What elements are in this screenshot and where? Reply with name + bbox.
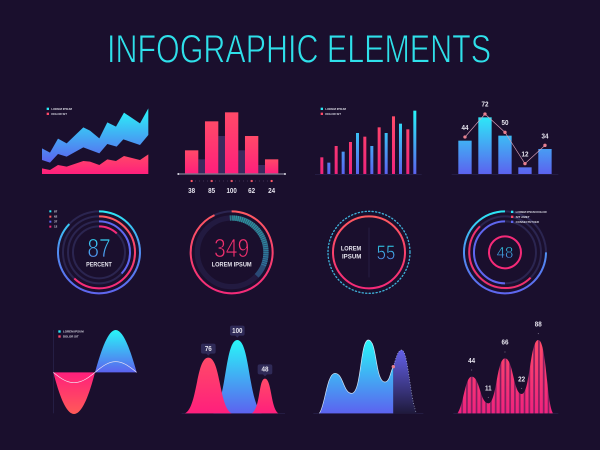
- blue area: [319, 340, 393, 413]
- value labels: 34: [541, 133, 549, 140]
- area chart: stacked bands: [42, 107, 148, 174]
- value labels: 44: [468, 358, 475, 365]
- legend: thin bars: [321, 107, 346, 116]
- value labels: 24: [268, 188, 275, 195]
- title: INFOGRAPHIC ELEMENTS: [107, 28, 491, 72]
- striped shape: [457, 340, 553, 413]
- blue thin bars: [327, 111, 416, 174]
- shadow bars: [198, 136, 265, 173]
- value labels: [188, 188, 275, 195]
- value labels: 50: [501, 120, 509, 127]
- value: 48: [497, 245, 514, 262]
- pink bars: [185, 112, 278, 173]
- pink thin bars: [320, 116, 409, 174]
- value labels: 38: [188, 188, 195, 195]
- value: 349: [214, 233, 249, 263]
- peak 76: [185, 358, 232, 413]
- legend: donut 48: [511, 210, 547, 224]
- axis: [177, 173, 286, 175]
- legend: 87: 12: [54, 225, 58, 229]
- legend: thin bars: LOREM IPSUM: [325, 107, 346, 111]
- caption: LOREM: [341, 245, 362, 252]
- legend: 87: 37: [54, 220, 58, 224]
- legend: sine: [58, 330, 84, 339]
- rings: [58, 211, 140, 293]
- pink area band: [42, 154, 148, 174]
- value labels: 12: [521, 152, 529, 159]
- legend: area chart: DOLOR SIT: [51, 112, 67, 116]
- value labels: [461, 102, 549, 159]
- white wave line: [53, 362, 137, 383]
- striped mountain chart: [453, 321, 558, 413]
- legend: thin bars: DOLOR SIT: [325, 112, 341, 116]
- donut: 349 lorem ipsum: [191, 211, 273, 293]
- value labels: 66: [501, 340, 509, 347]
- value: 55: [377, 242, 395, 264]
- bar chart: pink histogram: [177, 112, 286, 195]
- legend: 87: 62: [54, 215, 58, 219]
- value labels: 44: [461, 125, 469, 132]
- label dots: [471, 333, 539, 398]
- marker: [392, 365, 395, 368]
- sine wave chart: [53, 330, 137, 414]
- value: 87: [87, 233, 111, 263]
- legend: sine: LOREM IPSUM: [63, 330, 84, 334]
- donut: 87 percent: [49, 209, 140, 293]
- caption: LOREM IPSUM: [212, 262, 252, 269]
- legend: 87: [49, 209, 58, 229]
- smooth area chart: [313, 340, 423, 413]
- badge 48: 48: [261, 367, 269, 374]
- legend: area chart: [47, 107, 72, 116]
- legend: donut 48: CONSECTETUER: [516, 220, 540, 224]
- value labels: 11: [485, 385, 492, 392]
- blue bars: [458, 117, 552, 174]
- pink lobe: [53, 372, 95, 414]
- value labels: 22: [518, 376, 525, 383]
- dark area: [393, 350, 417, 413]
- value labels: 88: [535, 321, 542, 328]
- peak 48: [252, 379, 278, 413]
- caption: IPSUM: [342, 254, 362, 261]
- legend: donut 48: LOREM IPSUM DOLOR: [516, 210, 547, 214]
- trend line: [463, 112, 547, 165]
- thin bar chart: [315, 107, 422, 174]
- value labels: 85: [208, 188, 215, 195]
- badge 100: 100: [232, 328, 243, 335]
- bar and line combo chart: [452, 102, 558, 174]
- legend: area chart: LOREM IPSUM: [51, 107, 72, 111]
- blue area band: [42, 108, 148, 163]
- tick dots: [190, 180, 273, 182]
- peak 100: [213, 340, 262, 413]
- legend: donut 48: SIT AMET: [516, 215, 530, 219]
- value labels: 62: [248, 188, 255, 195]
- outline: [319, 340, 417, 413]
- donut: 48: [464, 210, 547, 293]
- caption: [341, 245, 362, 261]
- legend: 87: 87: [54, 209, 58, 213]
- gauge: lorem ipsum 55: [328, 211, 410, 293]
- mountain chart: [182, 326, 285, 413]
- rings: [464, 211, 546, 293]
- caption: PERCENT: [86, 262, 112, 269]
- value labels: 100: [226, 188, 237, 195]
- inner ring: [489, 236, 521, 268]
- value labels: [468, 321, 542, 392]
- value labels: 72: [481, 102, 489, 109]
- outer ring: [191, 211, 273, 293]
- badge 76: 76: [205, 346, 212, 353]
- legend: sine: DOLOR SIT: [63, 335, 79, 339]
- blue lobe: [95, 330, 137, 372]
